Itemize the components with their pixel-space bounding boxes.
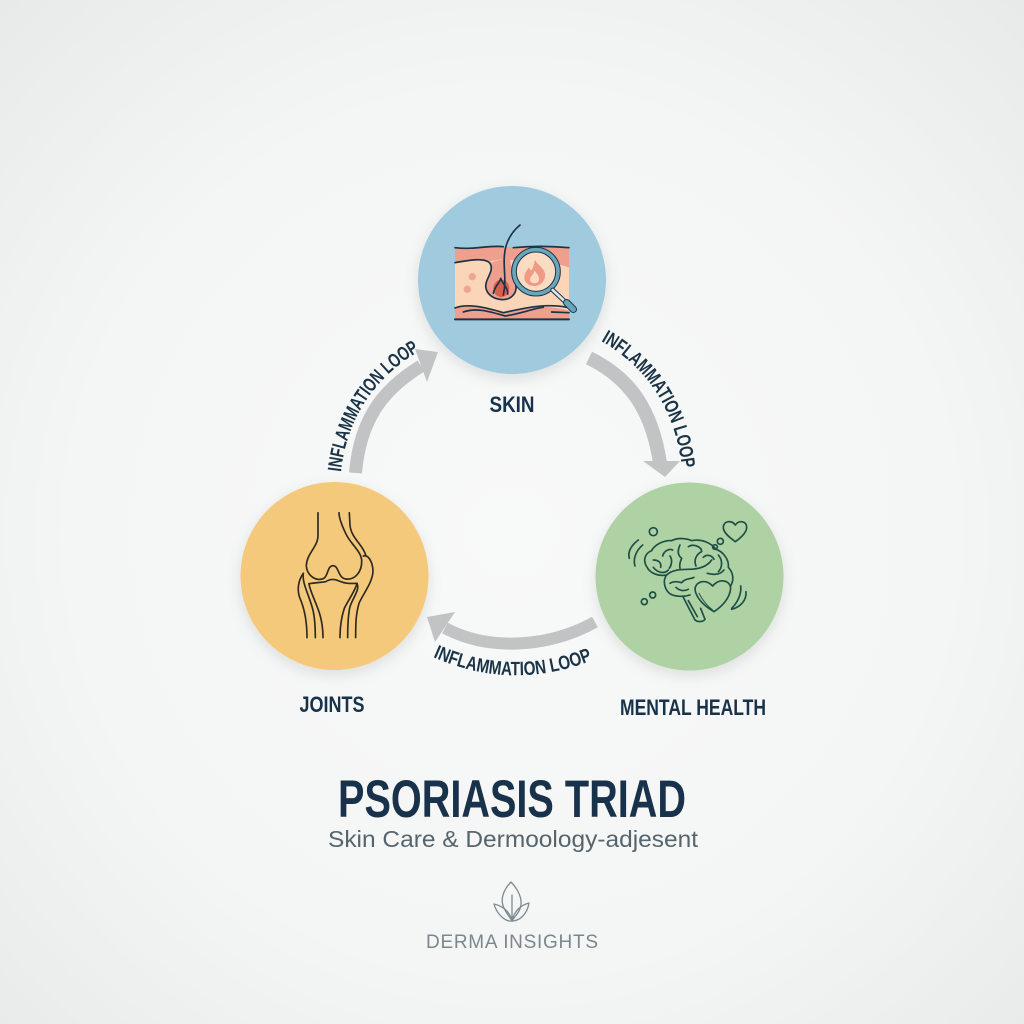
icon: leaf logo xyxy=(494,882,529,921)
arrow: mental health to joints xyxy=(427,612,595,644)
arrow label: bottom: INFLAMMATION LOOP xyxy=(434,645,590,676)
subtitle: Skin Care & Dermoology-adjesent xyxy=(328,826,699,852)
arrow: joints to skin xyxy=(356,349,438,473)
panel: skin xyxy=(418,186,606,417)
joints circle xyxy=(240,482,428,670)
skin circle xyxy=(418,186,606,374)
icon: skin cross-section with magnifier xyxy=(455,225,573,319)
panel: joints xyxy=(240,482,428,717)
arrow: skin to mental health xyxy=(589,358,680,477)
label: joints: JOINTS xyxy=(300,692,364,717)
arrow label: left: INFLAMMATION LOOP xyxy=(328,341,416,472)
icon: knee joint xyxy=(298,513,373,638)
label: mental health: MENTAL HEALTH xyxy=(620,695,766,720)
icon: brain with hearts xyxy=(629,522,747,622)
panel: mental health xyxy=(596,482,784,720)
mental health circle xyxy=(596,482,784,670)
label: skin: SKIN xyxy=(490,392,534,417)
arrow label: right: INFLAMMATION LOOP xyxy=(602,330,695,467)
title: PSORIASIS TRIAD xyxy=(338,770,686,829)
brand name: DERMA INSIGHTS xyxy=(426,932,598,953)
